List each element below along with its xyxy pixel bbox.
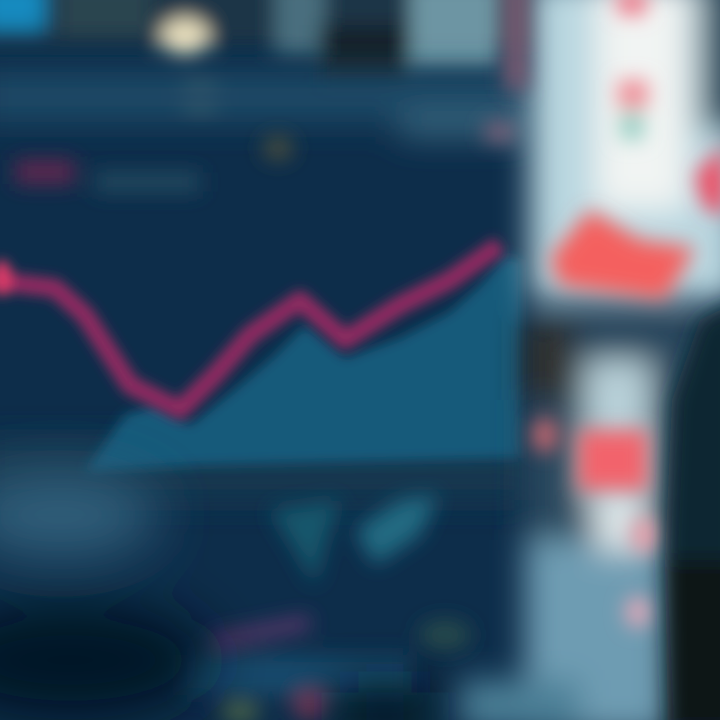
dark figure at right <box>665 300 720 720</box>
chart: red line <box>0 245 500 410</box>
foreground blurred shapes <box>0 473 430 720</box>
sign accents <box>505 0 648 140</box>
chart: teal area <box>85 255 522 472</box>
red blocks <box>532 145 720 628</box>
panel: top strip <box>0 0 540 108</box>
panel: lower bars <box>180 620 471 720</box>
map area <box>270 495 438 585</box>
chart labels <box>15 122 515 192</box>
panel: chart screen <box>0 72 525 500</box>
panel: right street scene <box>460 0 720 720</box>
